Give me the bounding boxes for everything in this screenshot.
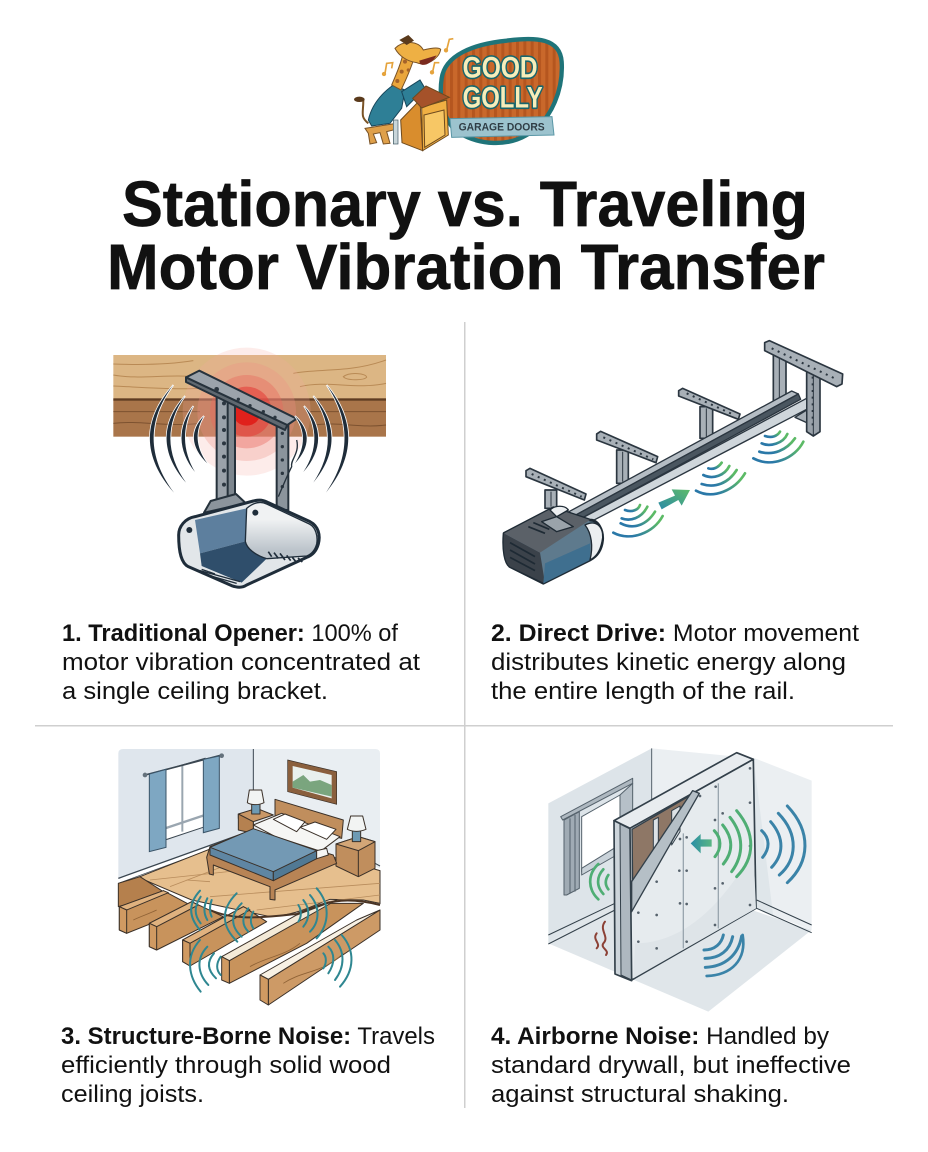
window and curtain — [561, 778, 633, 895]
text: item 2: the entire length of the rail. — [491, 678, 795, 705]
panel: traditional opener illustration — [113, 348, 386, 587]
logo giraffe — [354, 35, 441, 144]
logo wordmark: GOLLY — [463, 81, 543, 114]
framed picture — [288, 760, 337, 804]
logo: Good Golly Garage Doors: GARAGE DOORS — [459, 122, 545, 134]
window and curtains — [143, 753, 224, 852]
text: item 1: a single ceiling bracket. — [62, 678, 328, 705]
ceiling bracket — [186, 371, 297, 513]
text: item 2 — [491, 620, 859, 705]
logo badge — [441, 39, 562, 143]
text: item 1: motor vibration concentrated at — [62, 649, 420, 676]
floor — [138, 833, 380, 917]
bracket holes — [532, 348, 837, 497]
nightstands and lamps — [238, 790, 375, 877]
drywall panel — [614, 753, 756, 981]
rail — [557, 391, 807, 532]
panel: bedroom structure-borne illustration — [118, 749, 380, 1005]
text: item 4: 4. Airborne Noise: Handled by — [491, 1023, 829, 1050]
text: item 4: standard drywall, but ineffective — [491, 1052, 851, 1079]
vibration hotspot — [183, 348, 311, 476]
room walls — [118, 749, 380, 883]
panel: direct drive illustration — [504, 341, 843, 583]
text: item 4 — [491, 1023, 851, 1108]
wooden ceiling joist — [113, 355, 386, 437]
cable — [278, 440, 297, 497]
room — [548, 748, 812, 1012]
transmitted wave through wall — [590, 864, 608, 899]
heat squiggles — [595, 922, 607, 955]
text: item 4: against structural shaking. — [491, 1081, 789, 1108]
distributed waves — [613, 432, 803, 536]
text: item 1: 1. Traditional Opener: 100% of — [62, 620, 398, 647]
text: item 3: ceiling joists. — [61, 1081, 204, 1108]
text: item 3 — [61, 1023, 435, 1108]
motor unit — [179, 500, 319, 587]
title: Stationary vs. Traveling — [122, 168, 808, 240]
logo: Good Golly Garage Doors — [354, 35, 562, 151]
motor — [504, 506, 603, 583]
green waves on drywall — [714, 811, 751, 877]
rear brackets — [526, 341, 843, 508]
text: item 1 — [62, 620, 420, 705]
structure-borne waves — [190, 888, 351, 992]
logo banner — [450, 117, 554, 137]
blue waves in air — [704, 806, 805, 976]
title — [107, 168, 825, 303]
text: item 3: 3. Structure-Borne Noise: Travels — [61, 1023, 435, 1050]
logo house — [401, 86, 449, 151]
title: Motor Vibration Transfer — [107, 231, 825, 303]
vibration waves — [150, 385, 348, 493]
panel: drywall airborne illustration — [548, 748, 812, 1012]
text: item 2: 2. Direct Drive: Motor movement — [491, 620, 859, 647]
wood grain — [133, 910, 343, 983]
ceiling joists — [118, 877, 380, 1005]
bed — [207, 799, 343, 900]
travel arrow — [658, 489, 690, 509]
text: item 2: distributes kinetic energy along — [491, 649, 846, 676]
blocked arrow — [691, 834, 712, 853]
logo music notes — [383, 39, 453, 75]
logo wordmark: GOOD — [463, 51, 538, 84]
logo wordmark — [463, 51, 543, 114]
text: item 3: efficiently through solid wood — [61, 1052, 391, 1079]
